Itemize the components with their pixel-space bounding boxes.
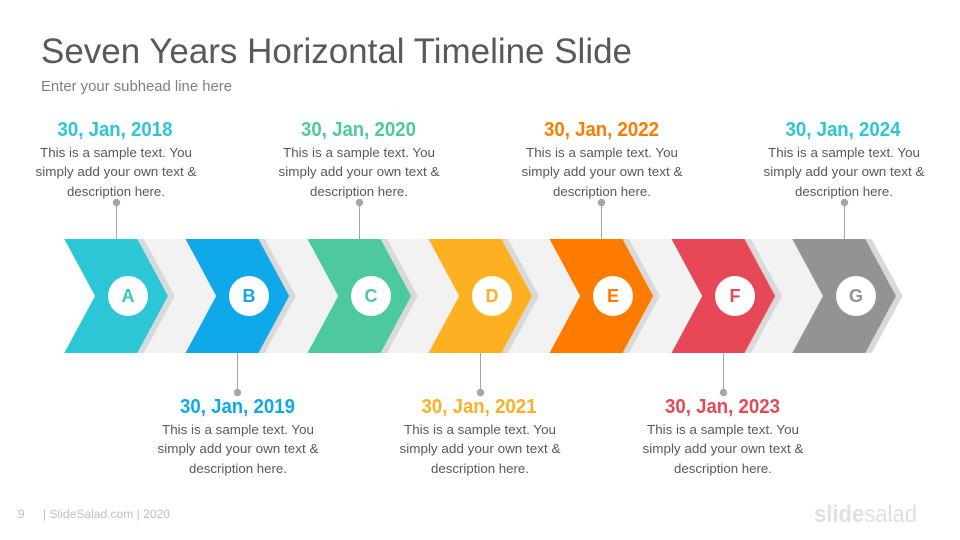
light connector segments bbox=[143, 239, 824, 353]
chevron B: B bbox=[242, 286, 256, 306]
milestone 2024: 30, Jan, 2024 bbox=[786, 119, 901, 141]
milestone 2021: This is a sample text. You bbox=[404, 422, 556, 437]
chevron B bbox=[186, 239, 289, 353]
milestone 2018: simply add your own text & bbox=[36, 164, 197, 179]
milestone 2020 bbox=[278, 119, 440, 239]
footer page number: 9 bbox=[18, 507, 25, 521]
title: Seven Years Horizontal Timeline Slide bbox=[41, 32, 632, 71]
milestone 2023: simply add your own text & bbox=[642, 441, 804, 456]
milestone 2022: 30, Jan, 2022 bbox=[544, 119, 659, 141]
milestone 2022: description here. bbox=[553, 184, 651, 199]
chevron C: C bbox=[364, 286, 378, 306]
chevron C bbox=[308, 239, 411, 353]
chevron D: D bbox=[486, 286, 498, 306]
milestone 2024: This is a sample text. You bbox=[768, 145, 920, 160]
chevron F bbox=[672, 239, 775, 353]
chevron shadows bbox=[137, 239, 903, 353]
footer text: | SlideSalad.com | 2020 bbox=[43, 507, 170, 521]
milestone 2020: 30, Jan, 2020 bbox=[301, 119, 416, 141]
milestone 2018: description here. bbox=[67, 184, 165, 199]
milestone 2019: description here. bbox=[189, 461, 287, 476]
milestone 2022: simply add your own text & bbox=[522, 164, 683, 179]
milestone 2023: description here. bbox=[674, 461, 772, 476]
milestone 2019: 30, Jan, 2019 bbox=[180, 396, 295, 418]
milestone 2023 bbox=[642, 353, 804, 476]
milestone 2022: This is a sample text. You bbox=[526, 145, 678, 160]
chevron G bbox=[792, 239, 896, 353]
milestone 2024: description here. bbox=[795, 184, 893, 199]
milestone 2022 bbox=[522, 119, 683, 239]
milestone 2021: 30, Jan, 2021 bbox=[422, 396, 536, 418]
milestone 2020: This is a sample text. You bbox=[283, 145, 435, 160]
logo wordmark: slidesalad bbox=[814, 501, 917, 528]
milestone 2018: 30, Jan, 2018 bbox=[58, 119, 172, 141]
milestone 2020: simply add your own text & bbox=[278, 164, 440, 179]
chevron G: G bbox=[849, 286, 863, 306]
milestone 2020: description here. bbox=[310, 184, 408, 199]
milestone 2024: simply add your own text & bbox=[764, 164, 925, 179]
milestone 2019 bbox=[158, 353, 319, 476]
subhead: Enter your subhead line here bbox=[41, 78, 232, 95]
milestone 2021 bbox=[400, 353, 561, 476]
milestone 2019: This is a sample text. You bbox=[162, 422, 314, 437]
chevron A bbox=[64, 239, 168, 353]
milestone 2023: This is a sample text. You bbox=[647, 422, 799, 437]
chevron E: E bbox=[607, 286, 619, 306]
milestone 2023: 30, Jan, 2023 bbox=[665, 396, 780, 418]
timeline chevron band bbox=[64, 239, 903, 353]
milestone 2024 bbox=[764, 119, 925, 239]
chevron D bbox=[428, 239, 532, 353]
chevron F: F bbox=[730, 286, 740, 306]
milestone 2018 bbox=[36, 119, 197, 239]
milestone 2021: description here. bbox=[431, 461, 529, 476]
milestone 2018: This is a sample text. You bbox=[40, 145, 192, 160]
chevron E bbox=[550, 239, 653, 353]
chevron A: A bbox=[122, 286, 134, 306]
milestone 2021: simply add your own text & bbox=[400, 441, 561, 456]
milestone 2019: simply add your own text & bbox=[158, 441, 319, 456]
